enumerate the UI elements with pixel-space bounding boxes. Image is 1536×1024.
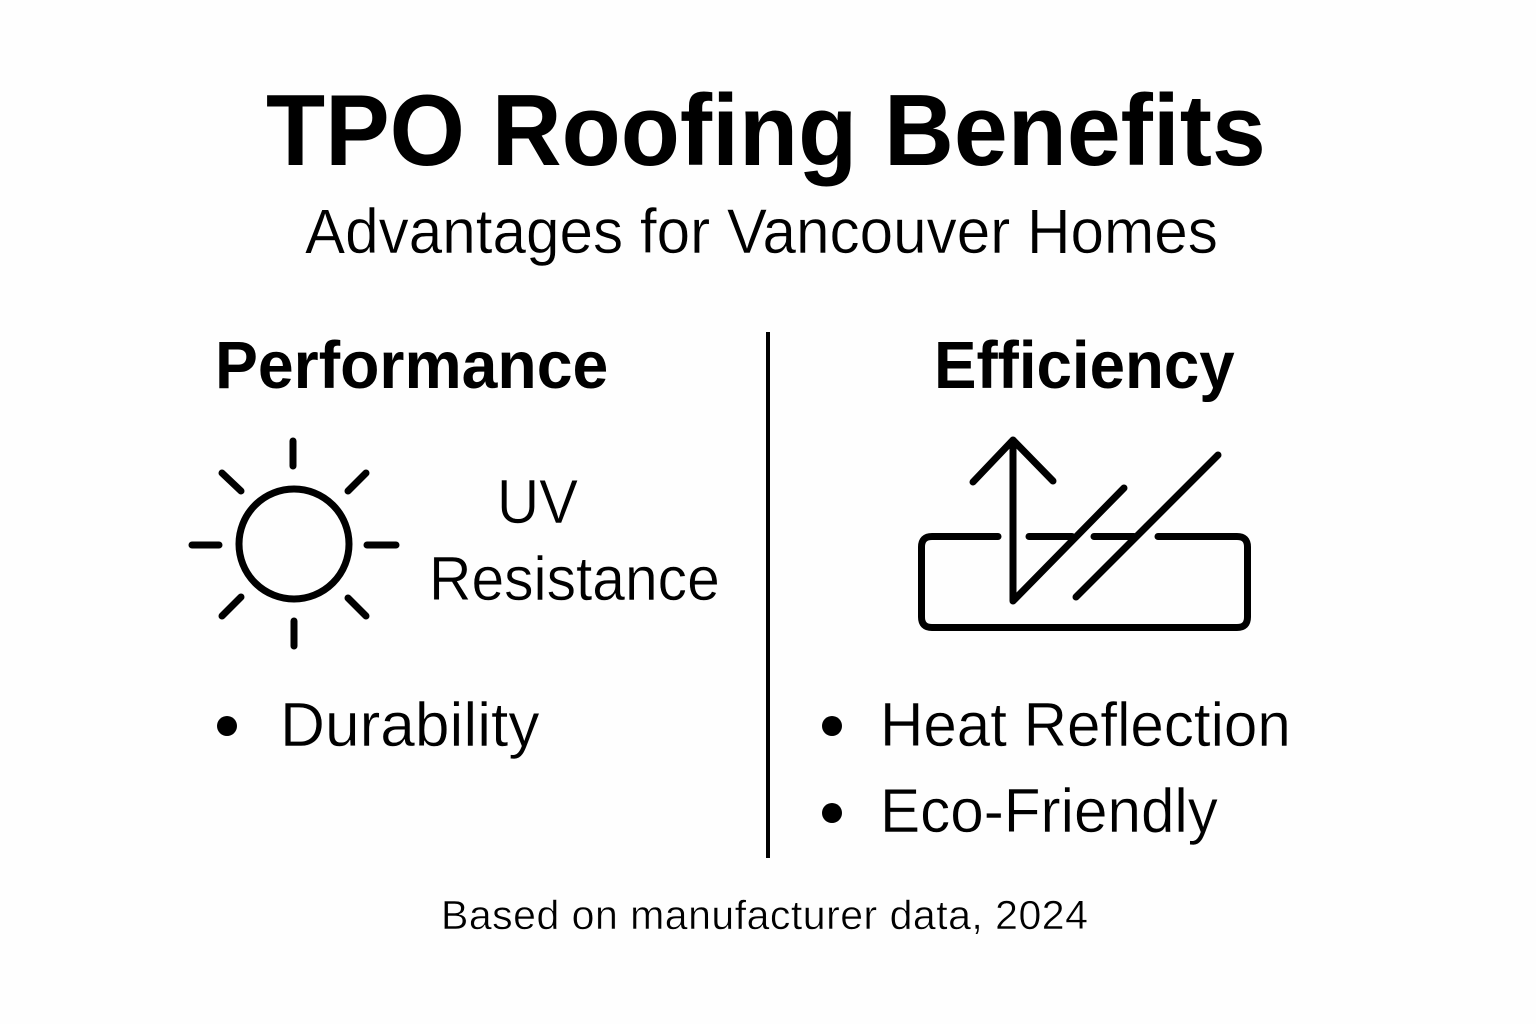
bullet item: durability: Durability xyxy=(280,691,539,760)
label: UV Resistance: UV xyxy=(497,468,578,537)
bullet item: heat reflection: Heat Reflection xyxy=(880,691,1291,760)
icon: heat reflection xyxy=(918,436,1251,631)
bullet item: eco-friendly: Eco-Friendly xyxy=(880,777,1218,846)
icon: sun xyxy=(188,438,400,650)
label: UV Resistance xyxy=(429,468,720,614)
label: UV Resistance: Resistance xyxy=(429,545,720,614)
heading: efficiency: Efficiency xyxy=(934,328,1235,403)
subtitle: Advantages for Vancouver Homes xyxy=(305,197,1218,267)
panel: performance xyxy=(188,328,720,760)
heading: performance: Performance xyxy=(215,328,608,403)
divider xyxy=(766,332,770,858)
panel: efficiency xyxy=(822,328,1291,846)
source note: Based on manufacturer data, 2024 xyxy=(441,892,1088,938)
title: TPO Roofing Benefits xyxy=(266,75,1266,187)
